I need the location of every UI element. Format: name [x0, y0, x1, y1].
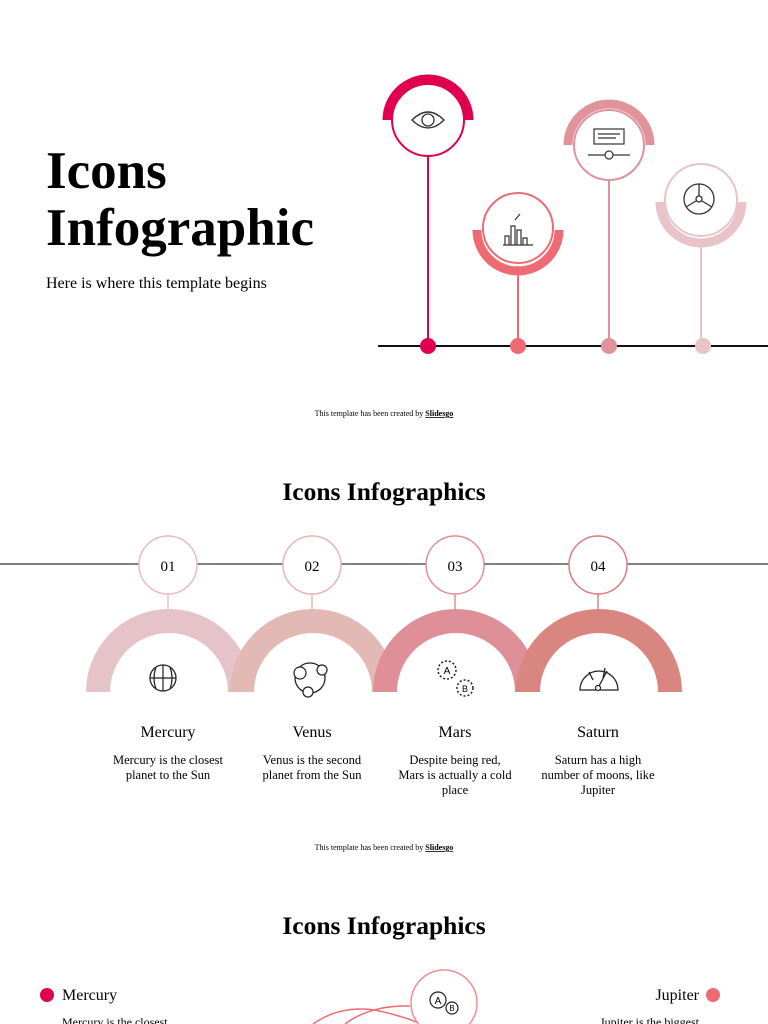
credit 1: This template has been created by Slidesgo — [315, 409, 453, 418]
step 03: 03 — [448, 559, 462, 575]
step 03: Mars is actually a cold — [398, 768, 512, 782]
step 03: Despite being red, — [409, 753, 501, 767]
item: Jupiter — [600, 987, 720, 1024]
step 01: Mercury is the closest — [113, 753, 224, 767]
pin 3: message — [568, 104, 650, 354]
step 02 — [263, 536, 362, 782]
step 02: Venus — [292, 724, 332, 741]
subtitle: Here is where this template begins — [46, 275, 267, 292]
title: Icons — [46, 142, 167, 200]
item: Mercury: Mercury — [62, 987, 117, 1004]
icon circle ABC — [411, 970, 477, 1024]
step 03: B — [462, 684, 468, 694]
title: Infographic — [46, 199, 314, 257]
step 03: A — [444, 666, 451, 677]
venn arcs — [313, 1006, 420, 1024]
step 01: Mercury — [140, 724, 196, 741]
step 02: 02 — [304, 559, 320, 575]
timeline line — [0, 563, 768, 565]
step 04: Saturn has a high — [555, 753, 642, 767]
step 04 — [541, 536, 655, 797]
item: Mercury — [40, 987, 168, 1024]
step 04: 04 — [590, 559, 606, 575]
section 3 title: Icons Infographics — [282, 911, 486, 940]
step 04: Saturn — [577, 724, 619, 741]
icon circle ABC: A — [435, 996, 442, 1007]
step 03: place — [442, 783, 469, 797]
step 04: number of moons, like — [541, 768, 655, 782]
step 01: planet to the Sun — [126, 768, 211, 782]
step 01: 01 — [160, 559, 176, 575]
title — [46, 142, 314, 257]
pin 4: wheel — [660, 164, 742, 354]
section 2 title: Icons Infographics — [282, 477, 486, 506]
arches — [98, 621, 670, 692]
step 04: Jupiter — [581, 783, 616, 797]
step 01 — [113, 536, 224, 782]
step 03 — [398, 536, 512, 797]
pin 2: chart — [477, 193, 559, 354]
icon circle ABC: B — [449, 1004, 455, 1013]
step 02: Venus is the second — [263, 753, 362, 767]
credit 2: This template has been created by Slidesgo — [315, 843, 453, 852]
step 02: planet from the Sun — [263, 768, 362, 782]
baseline — [378, 345, 768, 347]
pin 1: eye — [387, 79, 469, 354]
step 03: Mars — [439, 724, 471, 741]
item: Jupiter: Jupiter — [655, 987, 700, 1004]
